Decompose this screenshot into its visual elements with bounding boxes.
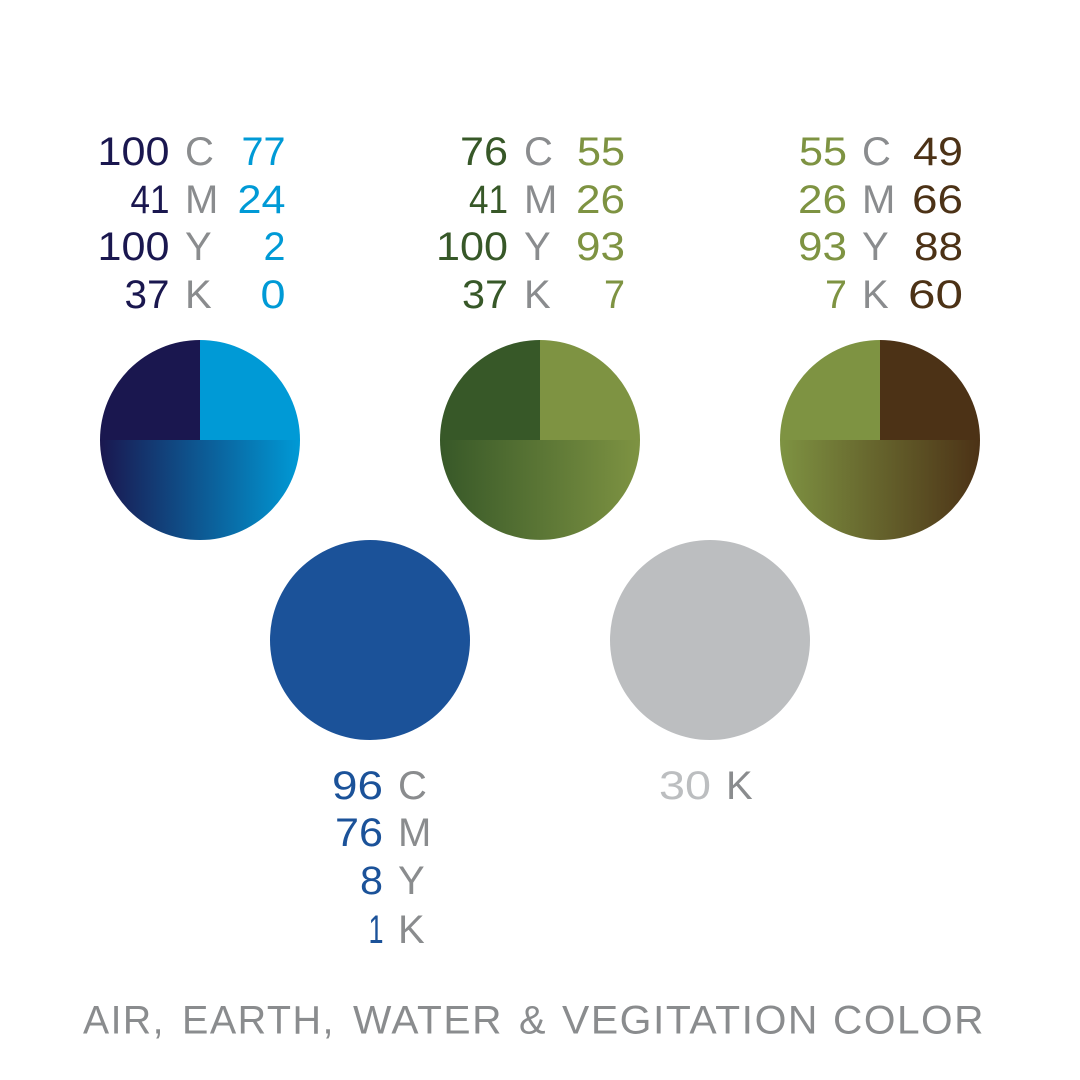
CMYK values: water blue: Y	[398, 859, 425, 903]
CMYK values: vegetation color pair: 100	[436, 225, 508, 269]
CMYK values: vegetation color pair: 26	[576, 178, 625, 222]
CMYK values: air color pair: 2	[264, 225, 286, 269]
CMYK values: air color pair: 41	[130, 178, 170, 222]
CMYK values: earth color pair: 55	[799, 130, 847, 174]
CMYK values: vegetation color pair: C	[524, 130, 553, 174]
title: COLOR	[833, 998, 985, 1042]
CMYK values: water blue: 96	[332, 764, 383, 808]
CMYK values: vegetation color pair	[436, 130, 625, 317]
CMYK values: air color pair: Y	[185, 225, 212, 269]
title: AIR,	[83, 998, 165, 1042]
CMYK values: air color pair: 77	[242, 130, 286, 174]
CMYK values: vegetation color pair: 37	[462, 273, 508, 317]
title	[83, 998, 985, 1042]
CMYK values: vegetation color pair: 41	[469, 178, 508, 222]
CMYK values: earth color pair	[798, 130, 963, 317]
CMYK values: water blue: 1	[368, 908, 384, 952]
CMYK values: vegetation color pair: K	[524, 273, 551, 317]
CMYK values: earth color pair: 66	[912, 178, 963, 222]
CMYK values: air color pair: 100	[98, 225, 170, 269]
CMYK values: earth color pair: K	[862, 273, 889, 317]
CMYK values: air color pair: 24	[238, 178, 286, 222]
title: WATER	[353, 998, 503, 1042]
CMYK values: air color pair: 100	[98, 130, 170, 174]
CMYK values: vegetation color pair: 76	[460, 130, 508, 174]
CMYK values: vegetation color pair: M	[524, 178, 557, 222]
circle: gray swatch	[610, 540, 810, 740]
circle: air blue gradient swatch	[100, 340, 300, 540]
CMYK values: air color pair: K	[185, 273, 212, 317]
CMYK values: earth color pair: 49	[913, 130, 963, 174]
CMYK values: earth color pair: C	[862, 130, 891, 174]
CMYK values: vegetation color pair: 7	[604, 273, 625, 317]
title: &	[519, 998, 547, 1042]
CMYK values: water blue	[332, 764, 431, 952]
CMYK values: vegetation color pair: Y	[524, 225, 551, 269]
CMYK values: water blue: 76	[335, 811, 383, 855]
CMYK values: air color pair: M	[185, 178, 218, 222]
CMYK values: earth color pair: 93	[798, 225, 847, 269]
CMYK values: gray: K	[726, 764, 753, 808]
CMYK values: air color pair: C	[185, 130, 214, 174]
CMYK values: air color pair: 37	[124, 273, 170, 317]
CMYK values: earth color pair: 88	[914, 225, 963, 269]
CMYK values: gray	[659, 764, 753, 808]
CMYK values: air color pair: 0	[260, 273, 286, 317]
CMYK values: earth color pair: 7	[825, 273, 847, 317]
CMYK values: earth color pair: M	[862, 178, 895, 222]
CMYK values: water blue: K	[398, 908, 425, 952]
CMYK values: vegetation color pair: 93	[576, 225, 625, 269]
circle: earth green-brown gradient swatch	[780, 340, 980, 540]
CMYK values: water blue: C	[398, 764, 427, 808]
CMYK values: water blue: M	[398, 811, 431, 855]
title: EARTH,	[182, 998, 335, 1042]
CMYK values: water blue: 8	[360, 859, 383, 903]
CMYK values: earth color pair: 60	[908, 273, 963, 317]
CMYK values: gray: 30	[659, 764, 711, 808]
CMYK values: vegetation color pair: 55	[577, 130, 625, 174]
CMYK values: earth color pair: Y	[862, 225, 889, 269]
CMYK values: air color pair	[98, 130, 286, 317]
title: VEGITATION	[562, 998, 819, 1042]
CMYK values: earth color pair: 26	[798, 178, 847, 222]
circle: water blue swatch	[270, 540, 470, 740]
circle: vegetation green gradient swatch	[440, 340, 640, 540]
